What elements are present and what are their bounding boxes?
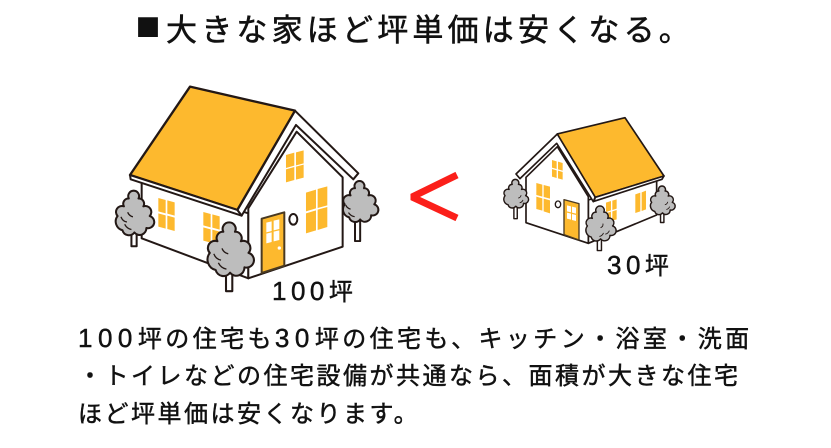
door [262, 212, 284, 273]
door windows [266, 219, 279, 243]
tree: right [343, 181, 378, 241]
front wall [526, 147, 588, 243]
illustration: large house [116, 87, 378, 291]
door knob [278, 246, 281, 250]
roof [130, 87, 295, 210]
gable trim [237, 111, 358, 216]
side windows [606, 191, 646, 223]
tree: right [650, 186, 675, 222]
tree: left [504, 179, 529, 219]
tree: left [116, 191, 154, 246]
eave [130, 175, 242, 216]
label: 100坪: 100坪 [272, 276, 353, 306]
line 1: 100坪の住宅も30坪の住宅も、キッチン・浴室・洗面 [78, 323, 752, 353]
roof [557, 118, 664, 197]
illustration: small house [504, 118, 675, 251]
comparison sign: less than [412, 175, 457, 218]
tree: front [586, 206, 616, 251]
round window [289, 214, 297, 225]
description text [78, 323, 752, 428]
side windows [158, 198, 220, 245]
front windows [536, 160, 563, 213]
round window [555, 201, 561, 208]
door windows [567, 205, 576, 221]
eave [594, 176, 664, 201]
door [564, 200, 579, 240]
front windows [286, 150, 327, 233]
tree: front [208, 222, 254, 291]
right wall [588, 178, 657, 243]
left wall [142, 182, 248, 278]
front wall [248, 132, 343, 278]
line 3: ほど坪単価は安くなります。 [78, 401, 420, 428]
gable trim [516, 134, 595, 202]
label: 30坪: 30坪 [607, 250, 669, 280]
title: ■ [136, 8, 164, 43]
line 2: ・トイレなどの住宅設備が共通なら、面積が大きな住宅 [78, 363, 740, 390]
title: 大きな家ほど坪単価は安くなる。 [166, 5, 694, 50]
